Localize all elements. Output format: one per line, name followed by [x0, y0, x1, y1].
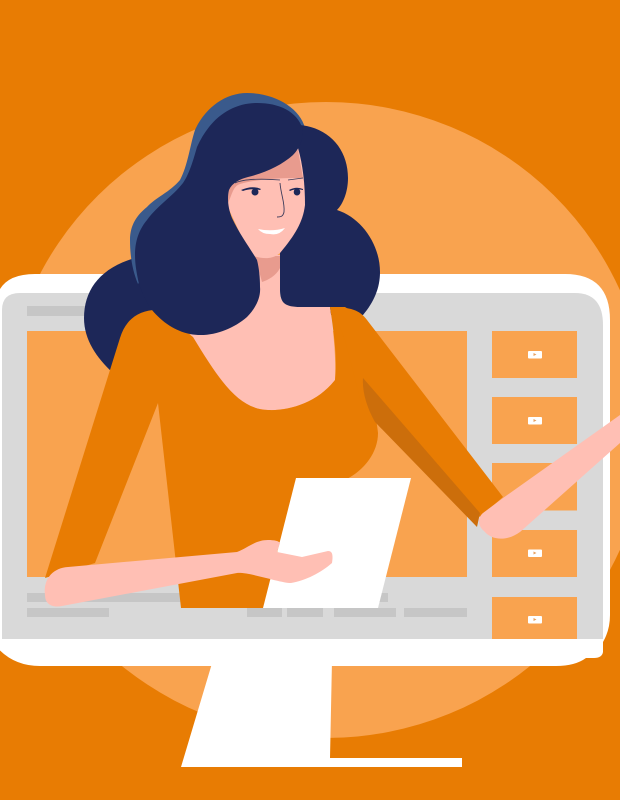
woman: [45, 93, 620, 608]
monitor stand: [181, 660, 462, 767]
face shadow: [222, 150, 303, 205]
nose: [277, 183, 284, 217]
left arm and hand: [45, 540, 333, 607]
caption placeholder bars: [27, 608, 467, 617]
neck and chest: [190, 255, 335, 410]
smile: [258, 228, 285, 234]
thumbnail 3: [492, 463, 577, 510]
thumbnail 5: [492, 597, 577, 639]
eyebrows: [235, 178, 303, 183]
hair front: [135, 103, 303, 335]
sleeve fold shadow: [363, 378, 480, 527]
title placeholder bar: [27, 306, 85, 316]
thumbnail 2: [492, 397, 577, 444]
progress placeholder bar: [27, 593, 388, 602]
video thumbnails: [492, 331, 577, 639]
thumbnail 1: [492, 331, 577, 378]
monitor: [0, 274, 610, 767]
paper: [263, 478, 411, 608]
eyes: [241, 187, 303, 196]
face: [220, 148, 305, 258]
monitor screen: [2, 293, 603, 639]
hair back lobes: [84, 258, 170, 372]
facial features: [235, 178, 303, 234]
neck shadow: [255, 256, 280, 282]
right arm and hand: [479, 415, 620, 539]
torso and left sleeve: [45, 307, 378, 608]
thumbnail 4: [492, 530, 577, 577]
monitor frame: [0, 274, 610, 666]
hair right side: [280, 125, 380, 315]
main video panel: [27, 331, 467, 577]
right sleeve: [332, 307, 503, 517]
hair highlight: [130, 93, 305, 284]
background circle: [4, 102, 620, 738]
